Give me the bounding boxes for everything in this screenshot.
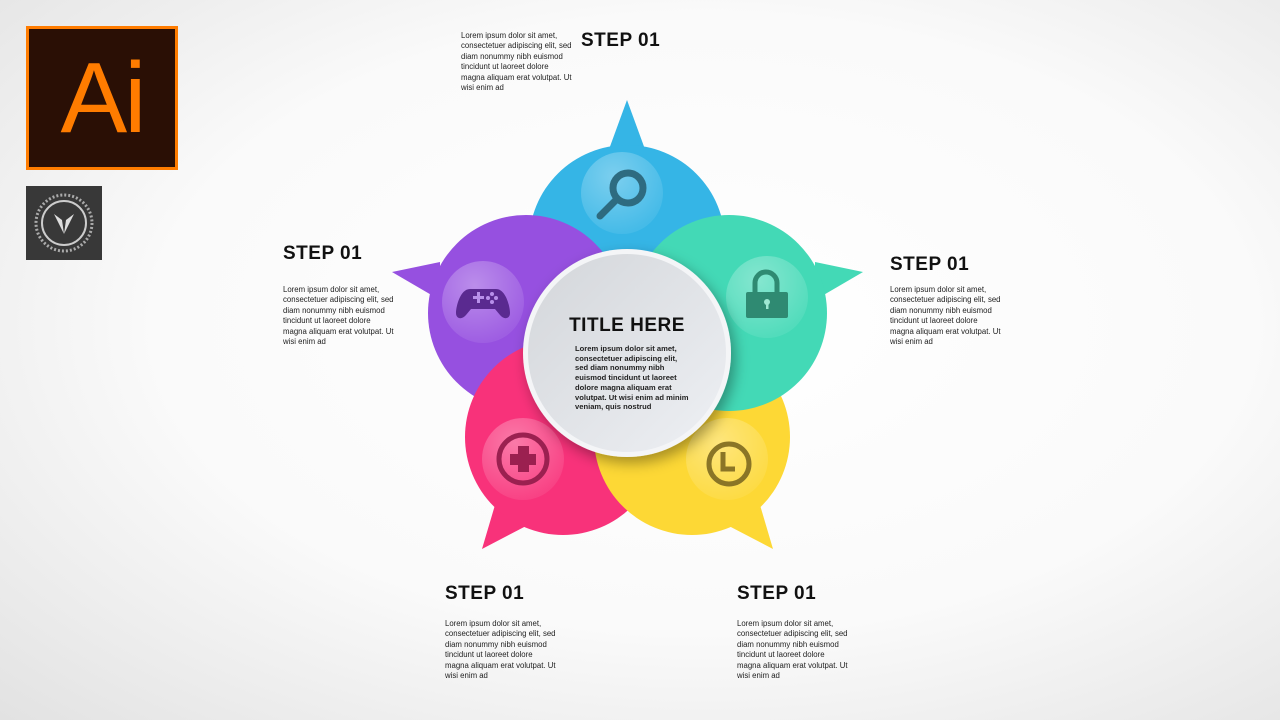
logo: Adobe Illustrator: Ai (61, 42, 143, 154)
icon: gamepad (456, 289, 510, 318)
text: bottom-left step: Lorem ipsum dolor sit amet, consectetuer adipiscing elit, sed diam nonummy nibh euismod tincidunt ut laoreet dolore magna aliquam erat volutpat. Ut wisi enim ad (445, 619, 556, 680)
icon: lock (746, 272, 788, 318)
text: right step: Lorem ipsum dolor sit amet, consectetuer adipiscing elit, sed diam nonummy nibh euismod tincidunt ut laoreet dolore magna aliquam erat volutpat. Ut wisi enim ad (890, 285, 1001, 346)
heading: left step: STEP 01 (283, 243, 362, 264)
petal: purple game (392, 215, 624, 411)
petal: pink plus (465, 339, 661, 549)
center title: TITLE HERE (569, 315, 685, 336)
icon: plus (499, 435, 547, 483)
petal: green lock (631, 215, 863, 411)
text: top step: Lorem ipsum dolor sit amet, consectetuer adipiscing elit, sed diam nonummy nibh euismod tincidunt ut laoreet dolore magna aliquam erat volutpat. Ut wisi enim ad (461, 31, 572, 92)
center text: Lorem ipsum dolor sit amet, consectetuer adipiscing elit, sed diam nonummy nibh euismod tincidunt ut laoreet dolore magna aliquam erat volutpat. Ut wisi enim ad minim veniam, quis nostrud (575, 344, 688, 411)
text: bottom-right step: Lorem ipsum dolor sit amet, consectetuer adipiscing elit, sed diam nonummy nibh euismod tincidunt ut laoreet dolore magna aliquam erat volutpat. Ut wisi enim ad (737, 619, 848, 680)
text: left step: Lorem ipsum dolor sit amet, consectetuer adipiscing elit, sed diam nonummy nibh euismod tincidunt ut laoreet dolore magna aliquam erat volutpat. Ut wisi enim ad (283, 285, 394, 346)
petal: yellow clock (594, 339, 790, 549)
heading: top step: STEP 01 (581, 30, 660, 51)
heading: right step: STEP 01 (890, 254, 969, 275)
logo: emblem (26, 186, 102, 260)
petal: blue search (529, 100, 725, 341)
icon: clock (709, 444, 749, 484)
icon: magnifier (600, 173, 643, 216)
heading: bottom-left step: STEP 01 (445, 583, 524, 604)
logo: Adobe Illustrator (26, 26, 178, 170)
heading: bottom-right step: STEP 01 (737, 583, 816, 604)
center circle (523, 249, 731, 457)
